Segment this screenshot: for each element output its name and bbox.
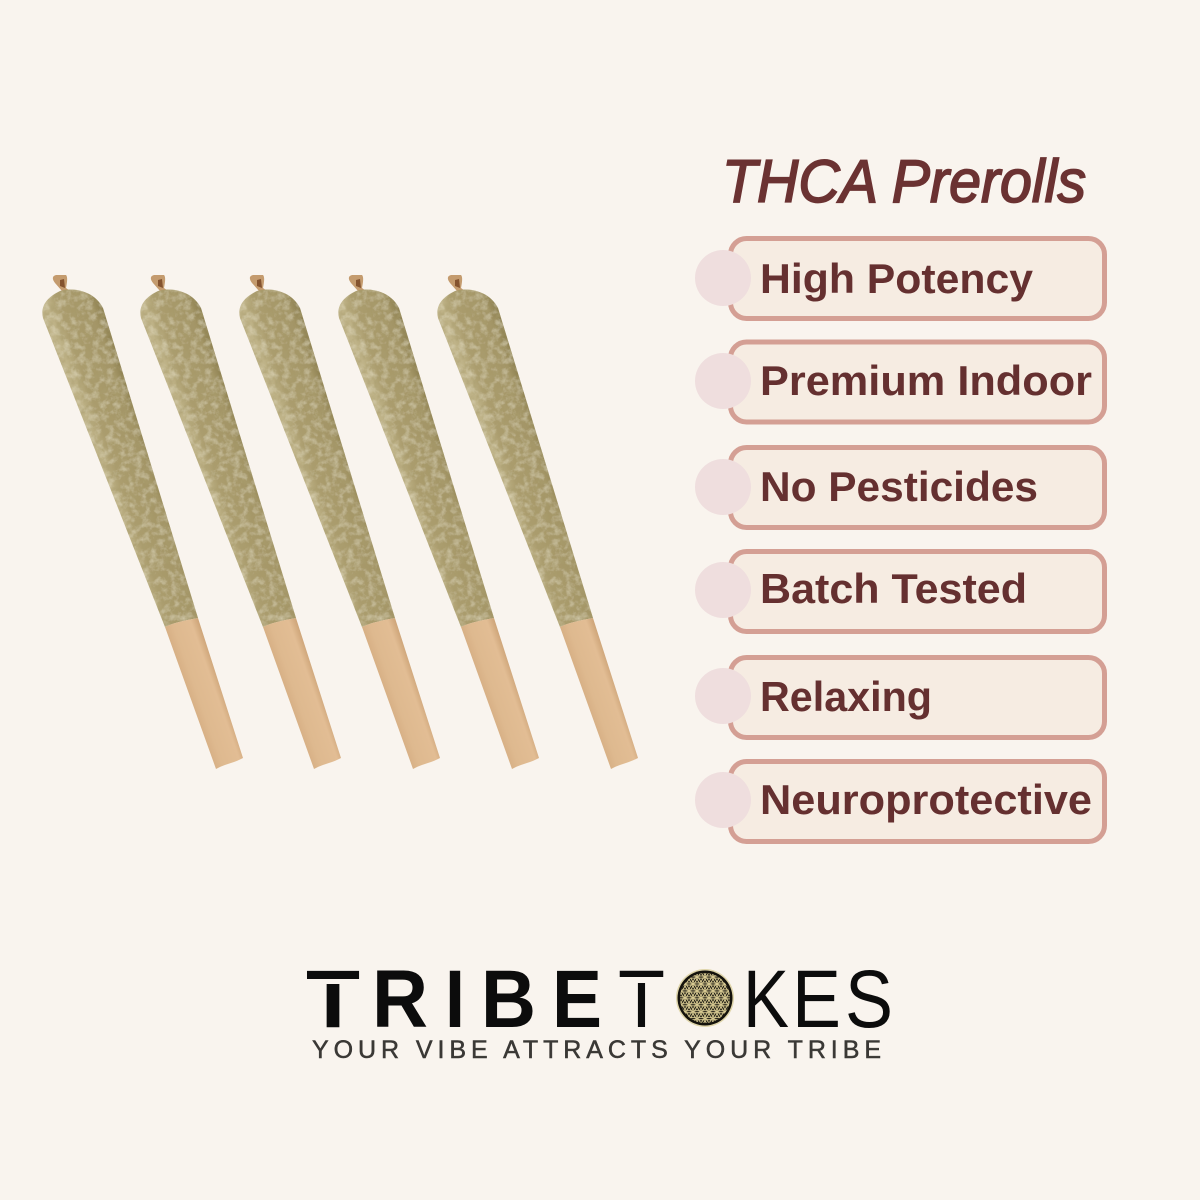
logo: TribeTokes — [300, 954, 893, 1064]
item: High Potency: High Potency — [760, 255, 1034, 302]
feature list — [695, 238, 1104, 842]
preroll 4 — [338, 275, 539, 769]
logo wordmark: E — [552, 954, 602, 1045]
item: Premium Indoor — [695, 342, 1104, 422]
logo wordmark: T — [306, 954, 360, 1045]
logo wordmark — [300, 954, 893, 1045]
item: No Pesticides — [695, 448, 1104, 528]
item: Batch Tested: Batch Tested — [760, 565, 1027, 612]
logo wordmark: B — [481, 954, 536, 1045]
item: High Potency — [695, 238, 1104, 318]
title: THCA Prerolls — [722, 148, 1086, 215]
preroll 3 — [239, 275, 440, 769]
item: Premium Indoor: Premium Indoor — [760, 357, 1092, 404]
item: Batch Tested — [695, 552, 1104, 632]
preroll 5 — [437, 275, 638, 769]
illustration: five prerolls — [42, 275, 638, 769]
logo wordmark: S — [845, 954, 893, 1045]
preroll 1 — [42, 275, 243, 769]
logo wordmark: I — [445, 954, 465, 1045]
icon: flower of life — [676, 969, 734, 1027]
logo tagline: YOUR VIBE ATTRACTS YOUR TRIBE — [312, 1036, 881, 1064]
logo wordmark: R — [372, 954, 428, 1045]
item: Neuroprotective — [695, 762, 1104, 842]
item: Relaxing — [695, 658, 1104, 738]
logo wordmark: K — [743, 954, 789, 1045]
preroll 2 — [140, 275, 341, 769]
logo wordmark: E — [792, 954, 841, 1045]
logo wordmark: T — [618, 954, 665, 1045]
item: No Pesticides: No Pesticides — [760, 463, 1038, 510]
item: Neuroprotective: Neuroprotective — [760, 776, 1092, 823]
item: Relaxing: Relaxing — [760, 673, 932, 720]
